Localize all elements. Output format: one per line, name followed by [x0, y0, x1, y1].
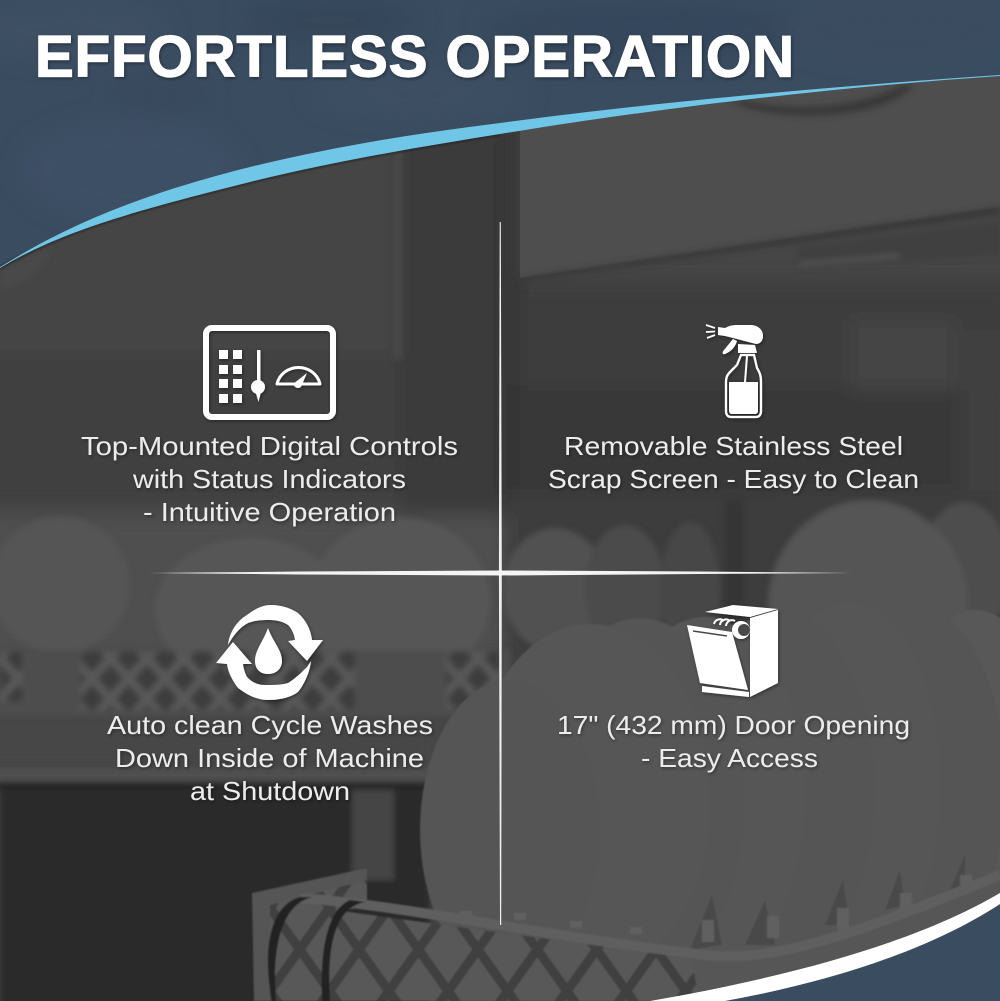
basket rack: [252, 868, 1000, 1001]
icon: spray bottle: [706, 325, 763, 417]
text: auto clean: Down Inside of Machine: [115, 743, 424, 773]
text: door opening: - Easy Access: [641, 743, 818, 773]
title: EFFORTLESS OPERATION: [35, 24, 794, 90]
icon: control panel: [206, 328, 333, 417]
text: scrap screen: Scrap Screen - Easy to Clean: [548, 464, 919, 494]
plate shadows between plates: [690, 855, 965, 950]
text: scrap screen: [548, 431, 919, 494]
text: auto clean: Auto clean Cycle Washes: [107, 710, 433, 740]
swoosh shadow: [0, 134, 500, 268]
panel: door opening: [557, 605, 910, 773]
text: digital controls: with Status Indicators: [132, 464, 406, 494]
text: door opening: 17" (432 mm) Door Opening: [557, 710, 910, 740]
text: auto clean: [107, 710, 433, 806]
vertical divider: [499, 222, 502, 925]
hood panel: [520, 70, 1000, 278]
light blue swoosh: [0, 75, 1000, 268]
text: scrap screen: Removable Stainless Steel: [564, 431, 903, 461]
top band: dark blue header background: [0, 0, 1000, 267]
text: auto clean: at Shutdown: [190, 776, 350, 806]
bottom right dark blue corner: [700, 905, 1000, 1001]
text: door opening: [557, 710, 910, 773]
panel: scrap screen: [548, 325, 919, 494]
text: digital controls: - Intuitive Operation: [143, 497, 396, 527]
text: digital controls: [81, 431, 458, 527]
plate-holder pegs: [460, 875, 972, 942]
white bottom swoosh: [650, 893, 1000, 1001]
icon: dishwasher: [687, 605, 778, 697]
icon: water cycle arrows: [216, 605, 323, 700]
text: digital controls: Top-Mounted Digital Controls: [81, 431, 458, 461]
panel: auto clean: [107, 605, 433, 806]
horizontal divider: [148, 570, 852, 576]
panel: digital controls: [81, 328, 458, 527]
